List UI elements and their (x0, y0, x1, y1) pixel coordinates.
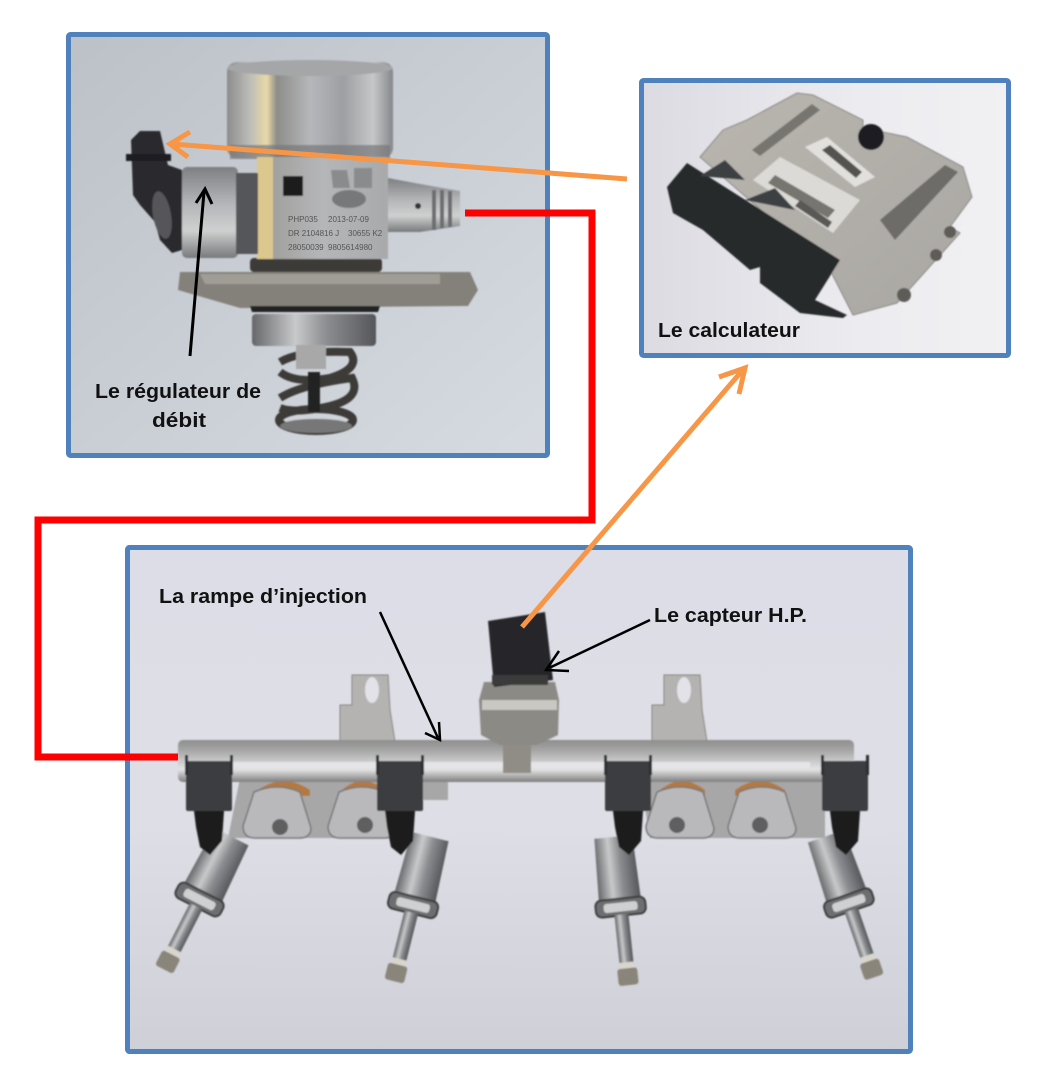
panel: injection rail photo (128, 548, 910, 1052)
arrow: rail pointer (380, 612, 440, 740)
injector 2 (370, 831, 454, 987)
pump markings: 28050039 (288, 243, 324, 252)
panel: ECU photo (642, 80, 1008, 356)
label: flow regulator: Le régulateur de (95, 380, 261, 403)
pump markings: 2013-07-09 (328, 215, 369, 224)
panel: high-pressure pump photo (68, 34, 548, 456)
pump markings: 9805614980 (328, 243, 373, 252)
ECU illustration (667, 93, 972, 318)
arrow: flow regulator pointer (190, 189, 212, 356)
pump markings: DR 2104816 J (288, 229, 339, 238)
pump markings: 30655 K2 (348, 229, 383, 238)
label: ECU: Le calculateur (658, 319, 800, 342)
label: HP sensor: Le capteur H.P. (654, 604, 807, 627)
pump illustration (126, 60, 478, 433)
injector 3 (588, 834, 654, 988)
HP sensor (503, 735, 531, 773)
pump markings: PHP035 (288, 215, 318, 224)
pump markings (288, 215, 383, 252)
arrow: ECU to regulator (170, 132, 627, 179)
arrow: sensor to ECU (522, 368, 745, 627)
injector 1 (142, 825, 254, 981)
rail tube (178, 740, 854, 782)
connector: red high-pressure fuel line (38, 213, 592, 757)
arrow: sensor pointer (546, 620, 650, 671)
rail illustration (142, 612, 898, 988)
injector 4 (802, 828, 898, 985)
label: flow regulator: débit (152, 409, 206, 432)
brackets (340, 675, 395, 742)
label: injection rail: La rampe d’injection (159, 585, 367, 608)
